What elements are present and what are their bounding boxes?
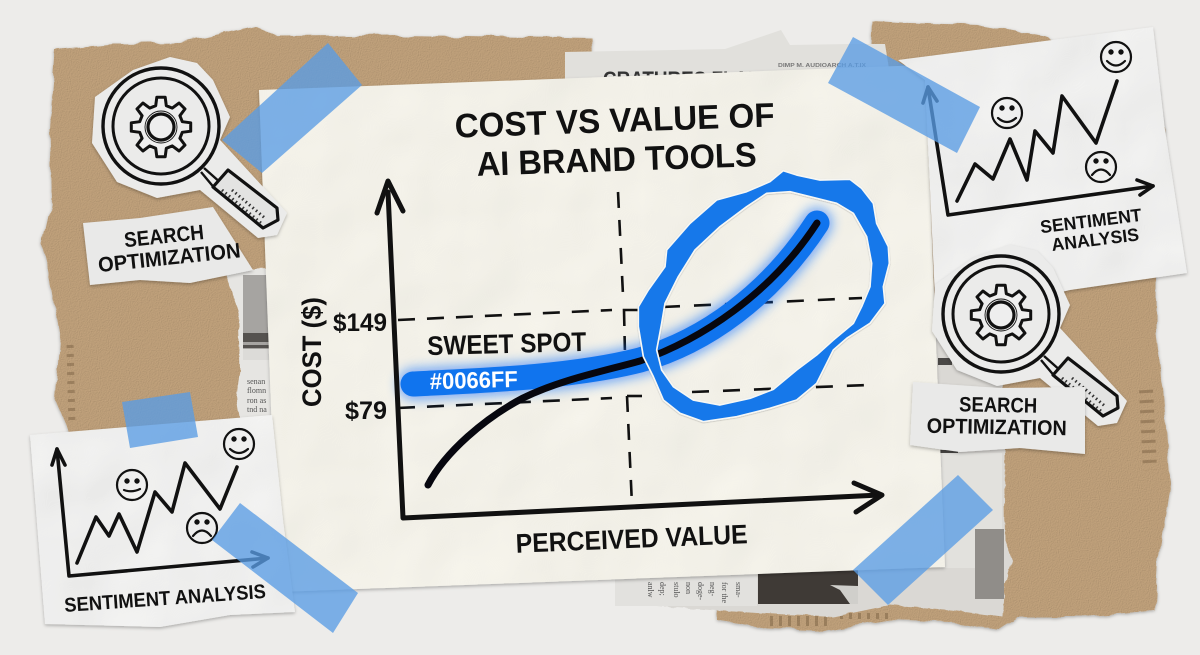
sentiment label: top right — [1039, 205, 1145, 256]
label: search optimization, right: SEARCH — [959, 393, 1037, 418]
newspaper: lower right with photos: neg- — [708, 582, 717, 597]
newspaper: lower right with photos — [615, 330, 1012, 617]
sentiment chart: bottom left — [52, 449, 268, 576]
newspaper: lower right with photos: anlw — [646, 582, 655, 598]
newspaper: lower right with photos: doge- — [696, 582, 705, 601]
newspaper: lower right with photos: dep; — [658, 582, 667, 596]
dashed guide lines — [398, 192, 868, 505]
sentiment note: top right — [898, 27, 1187, 320]
newspaper: lower right with photos: sma- — [734, 582, 743, 598]
blue tape strips — [122, 37, 993, 633]
sentiment label: top right: SENTIMENT — [1039, 205, 1143, 237]
label: search optimization, left: SEARCH — [123, 221, 205, 252]
axis labels and price points — [297, 297, 748, 559]
newspaper: lower right with photos: stulo — [672, 582, 681, 598]
smiley faces: top right — [992, 42, 1131, 182]
main paper sheet — [259, 65, 945, 592]
newspaper: top strip behind chart — [565, 30, 890, 91]
cardboard: right sheet — [700, 21, 1170, 630]
axis labels and price points: $149 — [333, 309, 387, 337]
axis labels and price points: COST ($) — [297, 297, 327, 407]
torn blue circle around the premium zone — [638, 171, 889, 422]
sweet spot label: SWEET SPOT — [427, 327, 587, 361]
label: search optimization, left — [83, 207, 253, 285]
tape: top left — [222, 43, 362, 173]
sentiment chart: top right — [923, 81, 1153, 215]
newspaper: left strip behind chart — [224, 268, 285, 425]
label: search optimization, right — [910, 382, 1085, 454]
label: search optimization, left: OPTIMIZATION — [97, 239, 242, 277]
label: search optimization, right: OPTIMIZATION — [927, 415, 1067, 440]
tape: bottom right — [853, 475, 993, 605]
tape: bottom left — [212, 503, 358, 633]
newspaper: left strip behind chart: tnd na — [247, 405, 267, 414]
sentiment note: bottom left — [30, 415, 295, 627]
smiley faces: bottom left — [117, 429, 254, 543]
axis labels and price points: $79 — [345, 397, 387, 425]
tape: left note — [122, 392, 198, 448]
value curve with blue highlight — [413, 223, 817, 485]
chart axes — [377, 181, 882, 518]
sweet spot label: #0066FF — [429, 366, 518, 394]
newspaper: left strip behind chart: ron as — [247, 396, 266, 405]
axis labels and price points: PERCEIVED VALUE — [515, 519, 748, 559]
sentiment label: top right: ANALYSIS — [1050, 224, 1140, 255]
magnifier sticker: top left — [92, 57, 287, 238]
tape: top right — [828, 37, 980, 153]
cardboard corrugation edges — [70, 345, 1150, 621]
newspaper: lower right with photos: non — [684, 582, 693, 594]
title — [454, 96, 775, 184]
newspaper: left strip behind chart: senan — [247, 377, 265, 386]
title: COST VS VALUE OF — [454, 96, 775, 146]
magnifier sticker: right — [932, 245, 1127, 426]
icon: magnifying glass with gear, right — [943, 256, 1118, 416]
sweet spot label — [427, 327, 587, 394]
cardboard: left sheet — [42, 26, 600, 450]
sentiment label: bottom left: SENTIMENT ANALYSIS — [64, 581, 267, 617]
title: AI BRAND TOOLS — [476, 136, 757, 184]
newspaper: top strip behind chart: CRATURES FLAIR — [603, 68, 767, 91]
newspaper: top strip behind chart: DIMP M. AUDIOARCH A.T.IX — [778, 63, 867, 69]
newspaper: lower right with photos: for the — [720, 582, 729, 604]
icon: magnifying glass with gear — [103, 68, 278, 228]
newspaper: left strip behind chart: flomn — [247, 386, 266, 395]
